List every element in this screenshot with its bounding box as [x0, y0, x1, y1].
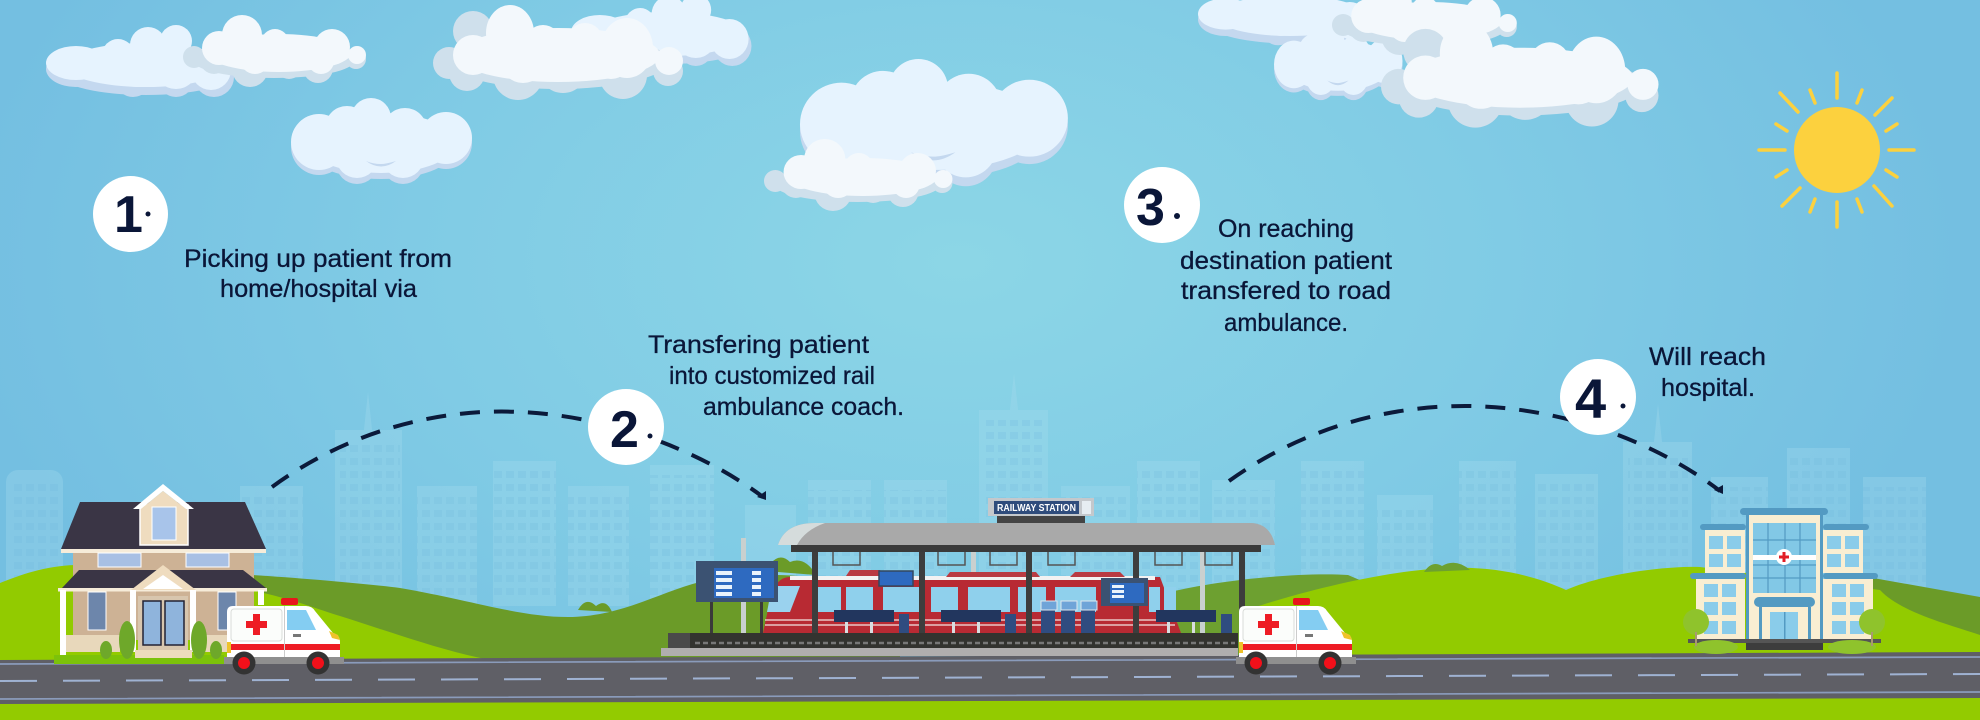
step 2 text: [648, 331, 904, 421]
arrow: house to station: [272, 412, 766, 500]
step 1 text: home/hospital via: [220, 275, 417, 303]
step 2 text: into customized rail: [669, 362, 875, 390]
hills: [0, 557, 1980, 660]
step 4 badge: 4: [1575, 367, 1606, 430]
step 4 text: [1649, 343, 1766, 402]
clouds: top centre-left group: [433, 0, 751, 100]
step 3 text: [1180, 215, 1392, 337]
railway station sign: RAILWAY STATION: [997, 503, 1076, 514]
step 4 badge: [1560, 359, 1636, 435]
step 2 badge: 2: [610, 401, 639, 459]
icon: ambulance at station: [1236, 598, 1356, 674]
clouds: centre group: [764, 59, 1068, 211]
train: [763, 552, 1181, 633]
step 4 text: Will reach: [1649, 343, 1766, 371]
city skyline: [6, 373, 1926, 608]
departure board left: [696, 538, 778, 633]
departure board right: [1101, 578, 1148, 606]
step 3 text: ambulance.: [1224, 309, 1348, 337]
step 1 text: [184, 245, 452, 303]
step 3 badge: 3: [1136, 179, 1165, 237]
step 1 badge: 1: [114, 186, 143, 244]
road: [0, 652, 1980, 720]
icon: hospital: [1683, 508, 1885, 654]
station platform: [661, 633, 1238, 656]
railway station sign: [988, 498, 1094, 523]
step 3 badge: [1124, 167, 1200, 243]
clouds: left group: [46, 15, 366, 97]
arrow: station to hospital: [1229, 406, 1723, 494]
step 4 text: hospital.: [1661, 374, 1755, 402]
step 3 text: transfered to road: [1181, 277, 1391, 305]
step 1 badge: [93, 176, 168, 252]
station canopy: [778, 523, 1275, 633]
departure board small: [879, 571, 913, 586]
railway station: [661, 498, 1275, 656]
step 3 text: destination patient: [1180, 247, 1392, 275]
icon: sun: [1759, 73, 1914, 227]
clouds: top right group: [1198, 0, 1658, 128]
step 2 text: ambulance coach.: [703, 393, 904, 421]
step 2 text: Transfering patient: [648, 331, 869, 359]
step 2 badge: [588, 389, 664, 465]
step 3 text: On reaching: [1218, 215, 1354, 243]
cloud: small round: [291, 98, 472, 184]
benches and kiosks: [834, 601, 1232, 633]
icon: house: [54, 484, 267, 664]
step 1 text: Picking up patient from: [184, 245, 452, 273]
icon: ambulance at house: [224, 598, 344, 674]
